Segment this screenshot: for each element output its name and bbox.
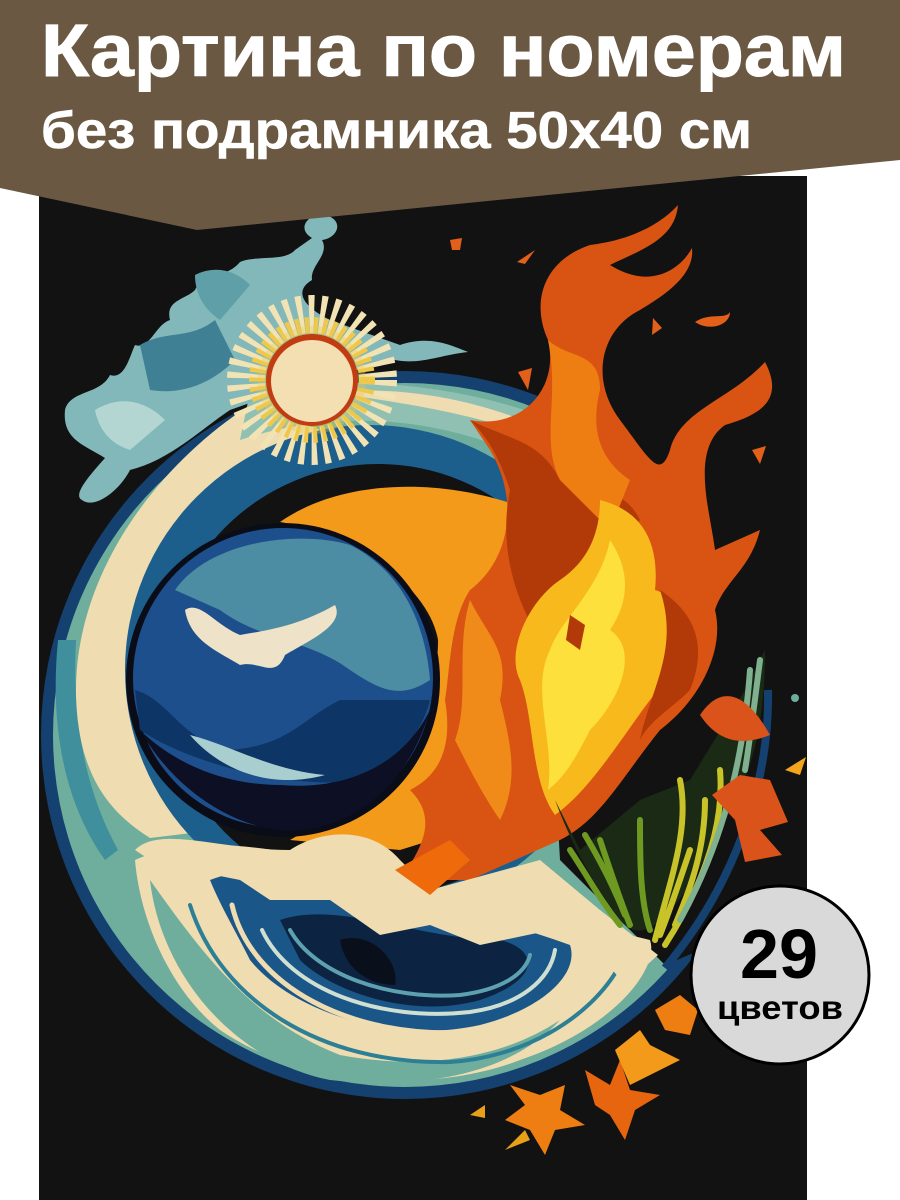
banner: [0, 0, 900, 230]
artwork: orange flowers: [470, 995, 698, 1155]
artwork: sun: [246, 314, 378, 446]
artwork: grass and wildflowers: [555, 650, 806, 945]
artwork: wave: [135, 834, 658, 1083]
artwork: orange moon: [280, 487, 560, 850]
badge: colour count: цветов: [717, 989, 843, 1026]
artwork: blue ring: [41, 370, 807, 1099]
artwork: earth globe: [126, 523, 440, 837]
badge: colour count: 29: [740, 915, 818, 993]
badge: colour count: [691, 886, 869, 1064]
artwork: clouds: [65, 215, 468, 503]
artwork: flames: [400, 205, 772, 880]
title: Картина по номерам: [41, 9, 846, 92]
panel: painting canvas: [39, 176, 807, 1200]
subtitle: без подрамника 50х40 см: [41, 102, 752, 160]
